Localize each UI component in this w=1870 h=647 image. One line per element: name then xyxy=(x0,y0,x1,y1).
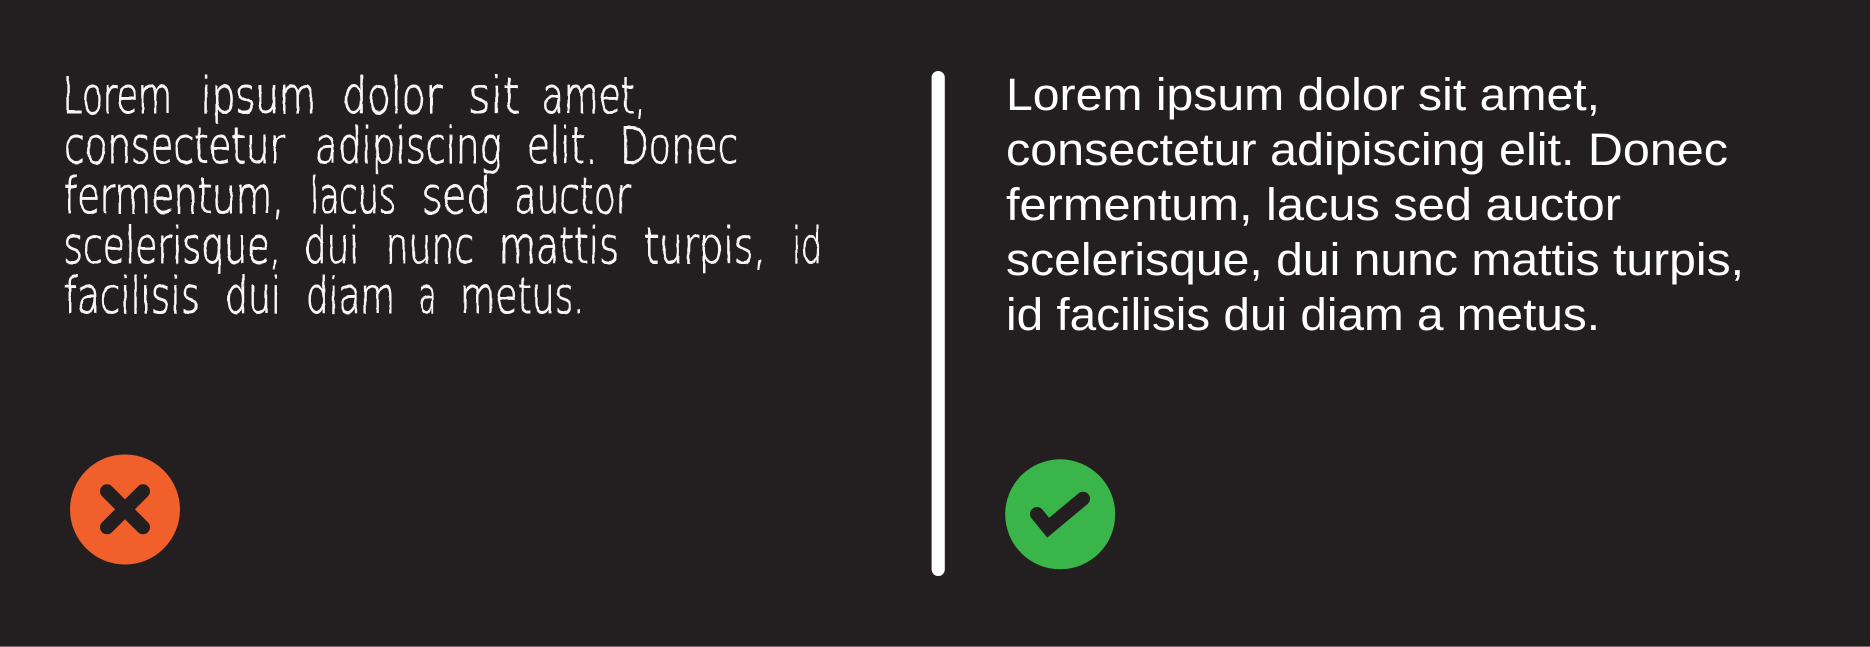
clean text block: consectetur adipiscing elit. Donec xyxy=(1006,124,1728,175)
icon: red cross xyxy=(70,454,180,564)
handwritten text block: elit. xyxy=(527,117,597,175)
centre divider xyxy=(932,71,945,576)
handwritten text block: adipiscing xyxy=(315,117,502,175)
handwritten text block: ipsum xyxy=(201,67,316,125)
handwritten text block: dolor xyxy=(342,67,442,125)
handwritten text block: facilisis xyxy=(64,267,200,325)
handwritten text block: scelerisque, xyxy=(64,217,281,275)
handwritten text block: dui xyxy=(225,267,281,325)
handwritten text block xyxy=(63,67,822,325)
handwritten text block: consectetur xyxy=(64,117,285,175)
icon: green check xyxy=(1005,459,1115,569)
handwritten text block: sed xyxy=(422,167,491,225)
handwritten text block: fermentum, xyxy=(64,167,284,225)
clean text block: scelerisque, dui nunc mattis turpis, xyxy=(1006,234,1744,285)
handwritten text block: a xyxy=(419,267,436,325)
handwritten text block: id xyxy=(792,217,822,275)
handwritten text block: mattis xyxy=(499,217,619,275)
handwritten text block: turpis, xyxy=(644,217,766,275)
clean text block xyxy=(1006,69,1744,340)
handwritten text block: amet, xyxy=(542,67,646,125)
clean text block: id facilisis dui diam a metus. xyxy=(1006,289,1600,340)
handwritten text block: Lorem xyxy=(63,67,172,125)
handwritten text block: auctor xyxy=(514,167,631,225)
handwritten text block: dui xyxy=(304,217,359,275)
handwritten text block: diam xyxy=(306,267,395,325)
handwritten text block: lacus xyxy=(310,167,396,225)
handwritten text block: metus. xyxy=(460,267,585,325)
clean text block: fermentum, lacus sed auctor xyxy=(1006,179,1621,230)
handwritten text block: sit xyxy=(468,67,520,125)
handwritten text block: nunc xyxy=(386,217,474,275)
clean text block: Lorem ipsum dolor sit amet, xyxy=(1006,69,1600,120)
handwritten text block: Donec xyxy=(620,117,738,175)
